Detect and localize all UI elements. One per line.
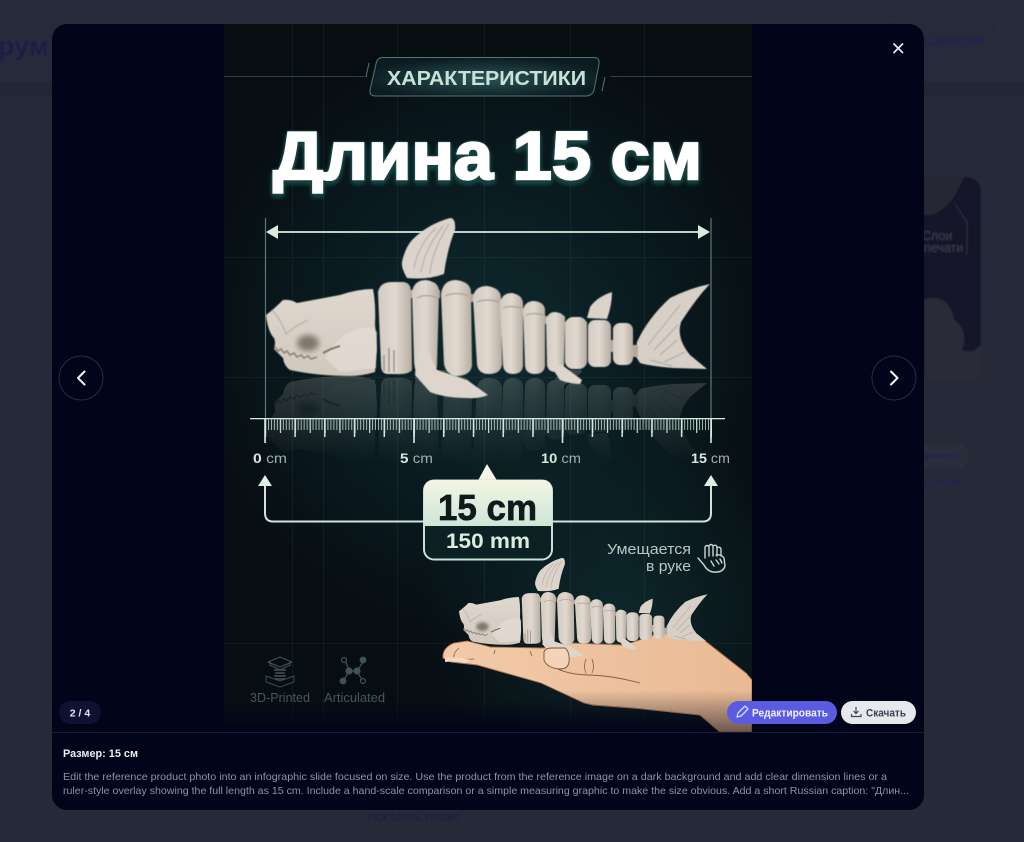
illustration: hand holding shark <box>443 558 752 732</box>
icon: hand <box>698 544 725 572</box>
caption body: Edit the reference product photo into an infographic slide focused on size. Use the product from the reference image on a dark background and add clear dimension lines or a <box>63 771 887 783</box>
ruler labels: 5 cm <box>400 450 433 466</box>
ruler labels <box>254 454 729 463</box>
button: edit <box>727 701 837 724</box>
label: Articulated: Articulated <box>324 691 385 705</box>
button: close <box>894 44 902 52</box>
background card: Слои <box>922 229 952 243</box>
background buttons: ь ПРОМТ <box>924 478 967 489</box>
caption block <box>52 732 924 797</box>
icon: 3D-printed <box>266 657 294 687</box>
ruler labels: 15 cm <box>691 450 730 466</box>
ruler <box>250 418 730 466</box>
shark reflection <box>266 370 707 446</box>
background card <box>900 177 981 379</box>
slide counter <box>59 701 101 724</box>
button: download <box>841 701 916 724</box>
background card: печати <box>924 241 963 255</box>
dimension lines <box>266 218 711 443</box>
callout: 15 cm / 150 mm: 150 mm <box>446 530 530 553</box>
background tab button <box>880 20 1000 60</box>
callout: 15 cm / 150 mm: 15 cm <box>438 487 537 528</box>
note: fits in hand: Умещается <box>607 542 691 558</box>
note: fits in hand: в руке <box>646 559 691 575</box>
modal panel <box>52 24 924 810</box>
background link: ПОКАЗАТЬ ПРОМТ <box>368 813 461 824</box>
callout: 15 cm / 150 mm <box>424 464 552 560</box>
button: previous <box>59 356 103 400</box>
title: Длина 15 см <box>273 118 702 194</box>
ruler labels: 0 cm <box>253 450 287 466</box>
slide counter: 2 / 4 <box>70 708 90 720</box>
caption title: Размер: 15 см <box>63 748 138 760</box>
icon: articulated <box>340 657 366 684</box>
bracket with arrows <box>258 475 718 522</box>
photo: articulated shark <box>266 218 710 398</box>
thumb <box>544 648 569 669</box>
background buttons: ровать <box>924 450 961 462</box>
label: 3D-Printed: 3D-Printed <box>250 691 310 705</box>
caption body <box>63 771 909 797</box>
background buttons <box>900 444 969 489</box>
ruler labels: 10 cm <box>541 450 581 466</box>
button: download: Скачать <box>866 708 906 720</box>
caption body: ruler-style overlay showing the full length as 15 cm. Include a hand-scale comparison or a simple measuring graphic to make the size obvious. Add a short Russian caption: "Длин... <box>63 785 909 797</box>
badge: ХАРАКТЕРИСТИКИ <box>366 58 605 96</box>
button: edit: Редактировать <box>752 708 828 720</box>
background tab button: сценарии <box>924 34 983 48</box>
button: next <box>872 356 916 400</box>
note: fits in hand <box>607 542 725 575</box>
infographic slide <box>224 24 752 732</box>
small shark <box>459 558 708 657</box>
badge: ХАРАКТЕРИСТИКИ: ХАРАКТЕРИСТИКИ <box>387 68 586 90</box>
